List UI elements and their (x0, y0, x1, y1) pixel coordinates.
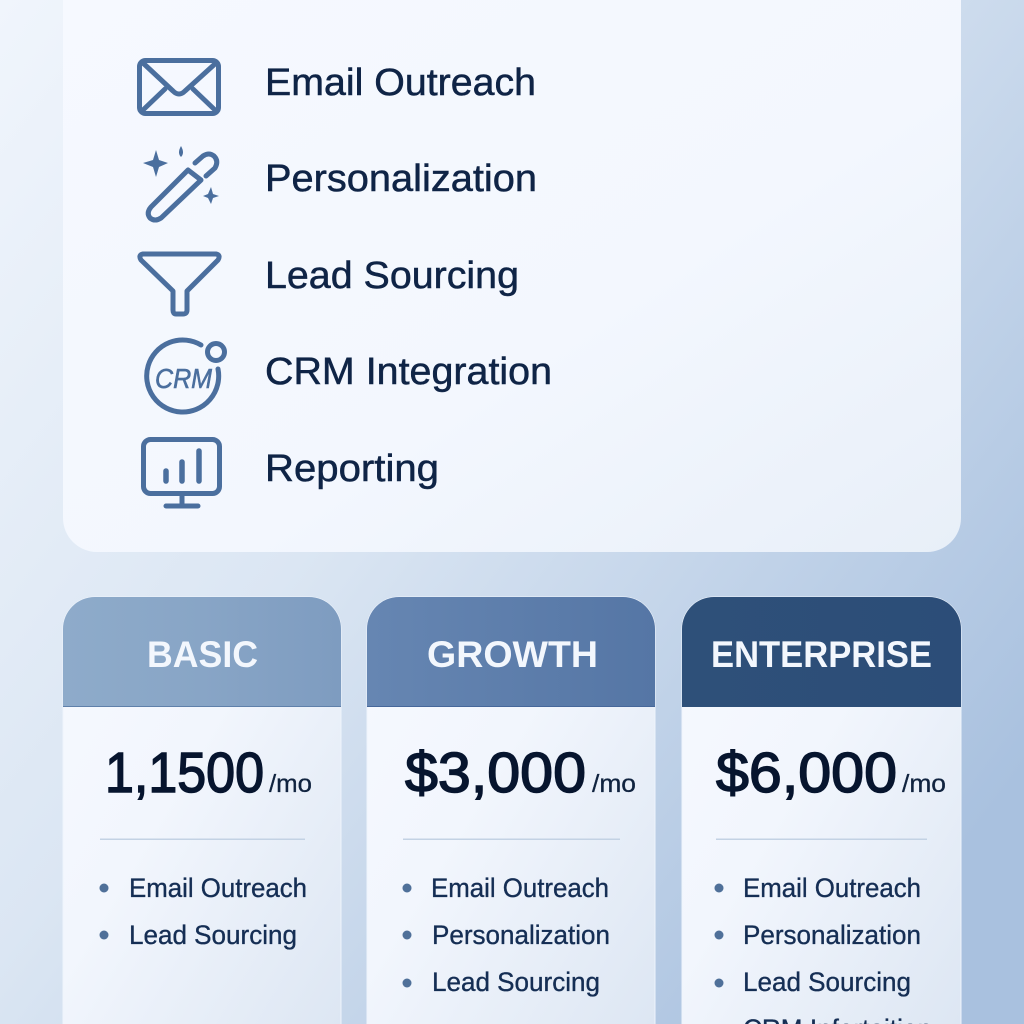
price: Basic: /mo (269, 770, 312, 798)
label: Lead Sourcing: Lead Sourcing (265, 255, 519, 297)
header: Enterprise: ENTERPRISE (711, 634, 932, 675)
panel: Growth plan (367, 597, 655, 1024)
header: Growth: GROWTH (427, 634, 598, 675)
feature list: Growth: Lead Sourcing (432, 967, 600, 997)
panel: Basic plan (63, 597, 341, 1024)
panel: Enterprise plan (682, 597, 961, 1024)
icon: envelope (140, 60, 218, 114)
feature list: Growth: Email Outreach (431, 873, 609, 903)
feature list: Basic: Email Outreach (129, 873, 307, 903)
price: Enterprise: /mo (902, 770, 946, 798)
price: Basic: 1,1500 (105, 741, 264, 805)
header: Enterprise (682, 597, 961, 707)
label: Email Outreach: Email Outreach (265, 62, 536, 104)
price: Growth: $3,000 (405, 741, 586, 805)
icon: magic wand (143, 146, 219, 220)
header: Basic (63, 597, 341, 707)
icon: funnel (140, 254, 219, 314)
feature list: Enterprise: Personalization (743, 920, 921, 950)
feature list: Growth: Personalization (432, 920, 610, 950)
label: CRM Integration: CRM Integration (265, 351, 552, 393)
feature list: Enterprise (714, 873, 932, 1024)
header: Growth (367, 597, 655, 707)
feature list: Basic (100, 873, 307, 950)
price: Growth: /mo (592, 770, 636, 798)
icon: reporting monitor (144, 440, 220, 506)
feature list: Enterprise: Lead Sourcing (743, 967, 911, 997)
icon: CRM circle (147, 340, 224, 412)
panel: features (63, 0, 961, 552)
feature list: Growth (402, 873, 610, 997)
label: Reporting: Reporting (265, 448, 439, 490)
price: Enterprise: $6,000 (716, 741, 897, 805)
feature list: Enterprise: Email Outreach (743, 873, 921, 903)
label: Personalization: Personalization (265, 158, 537, 200)
icon: CRM circle: CRM (155, 363, 213, 394)
feature list: Basic: Lead Sourcing (129, 920, 297, 950)
header: Basic: BASIC (147, 634, 258, 675)
